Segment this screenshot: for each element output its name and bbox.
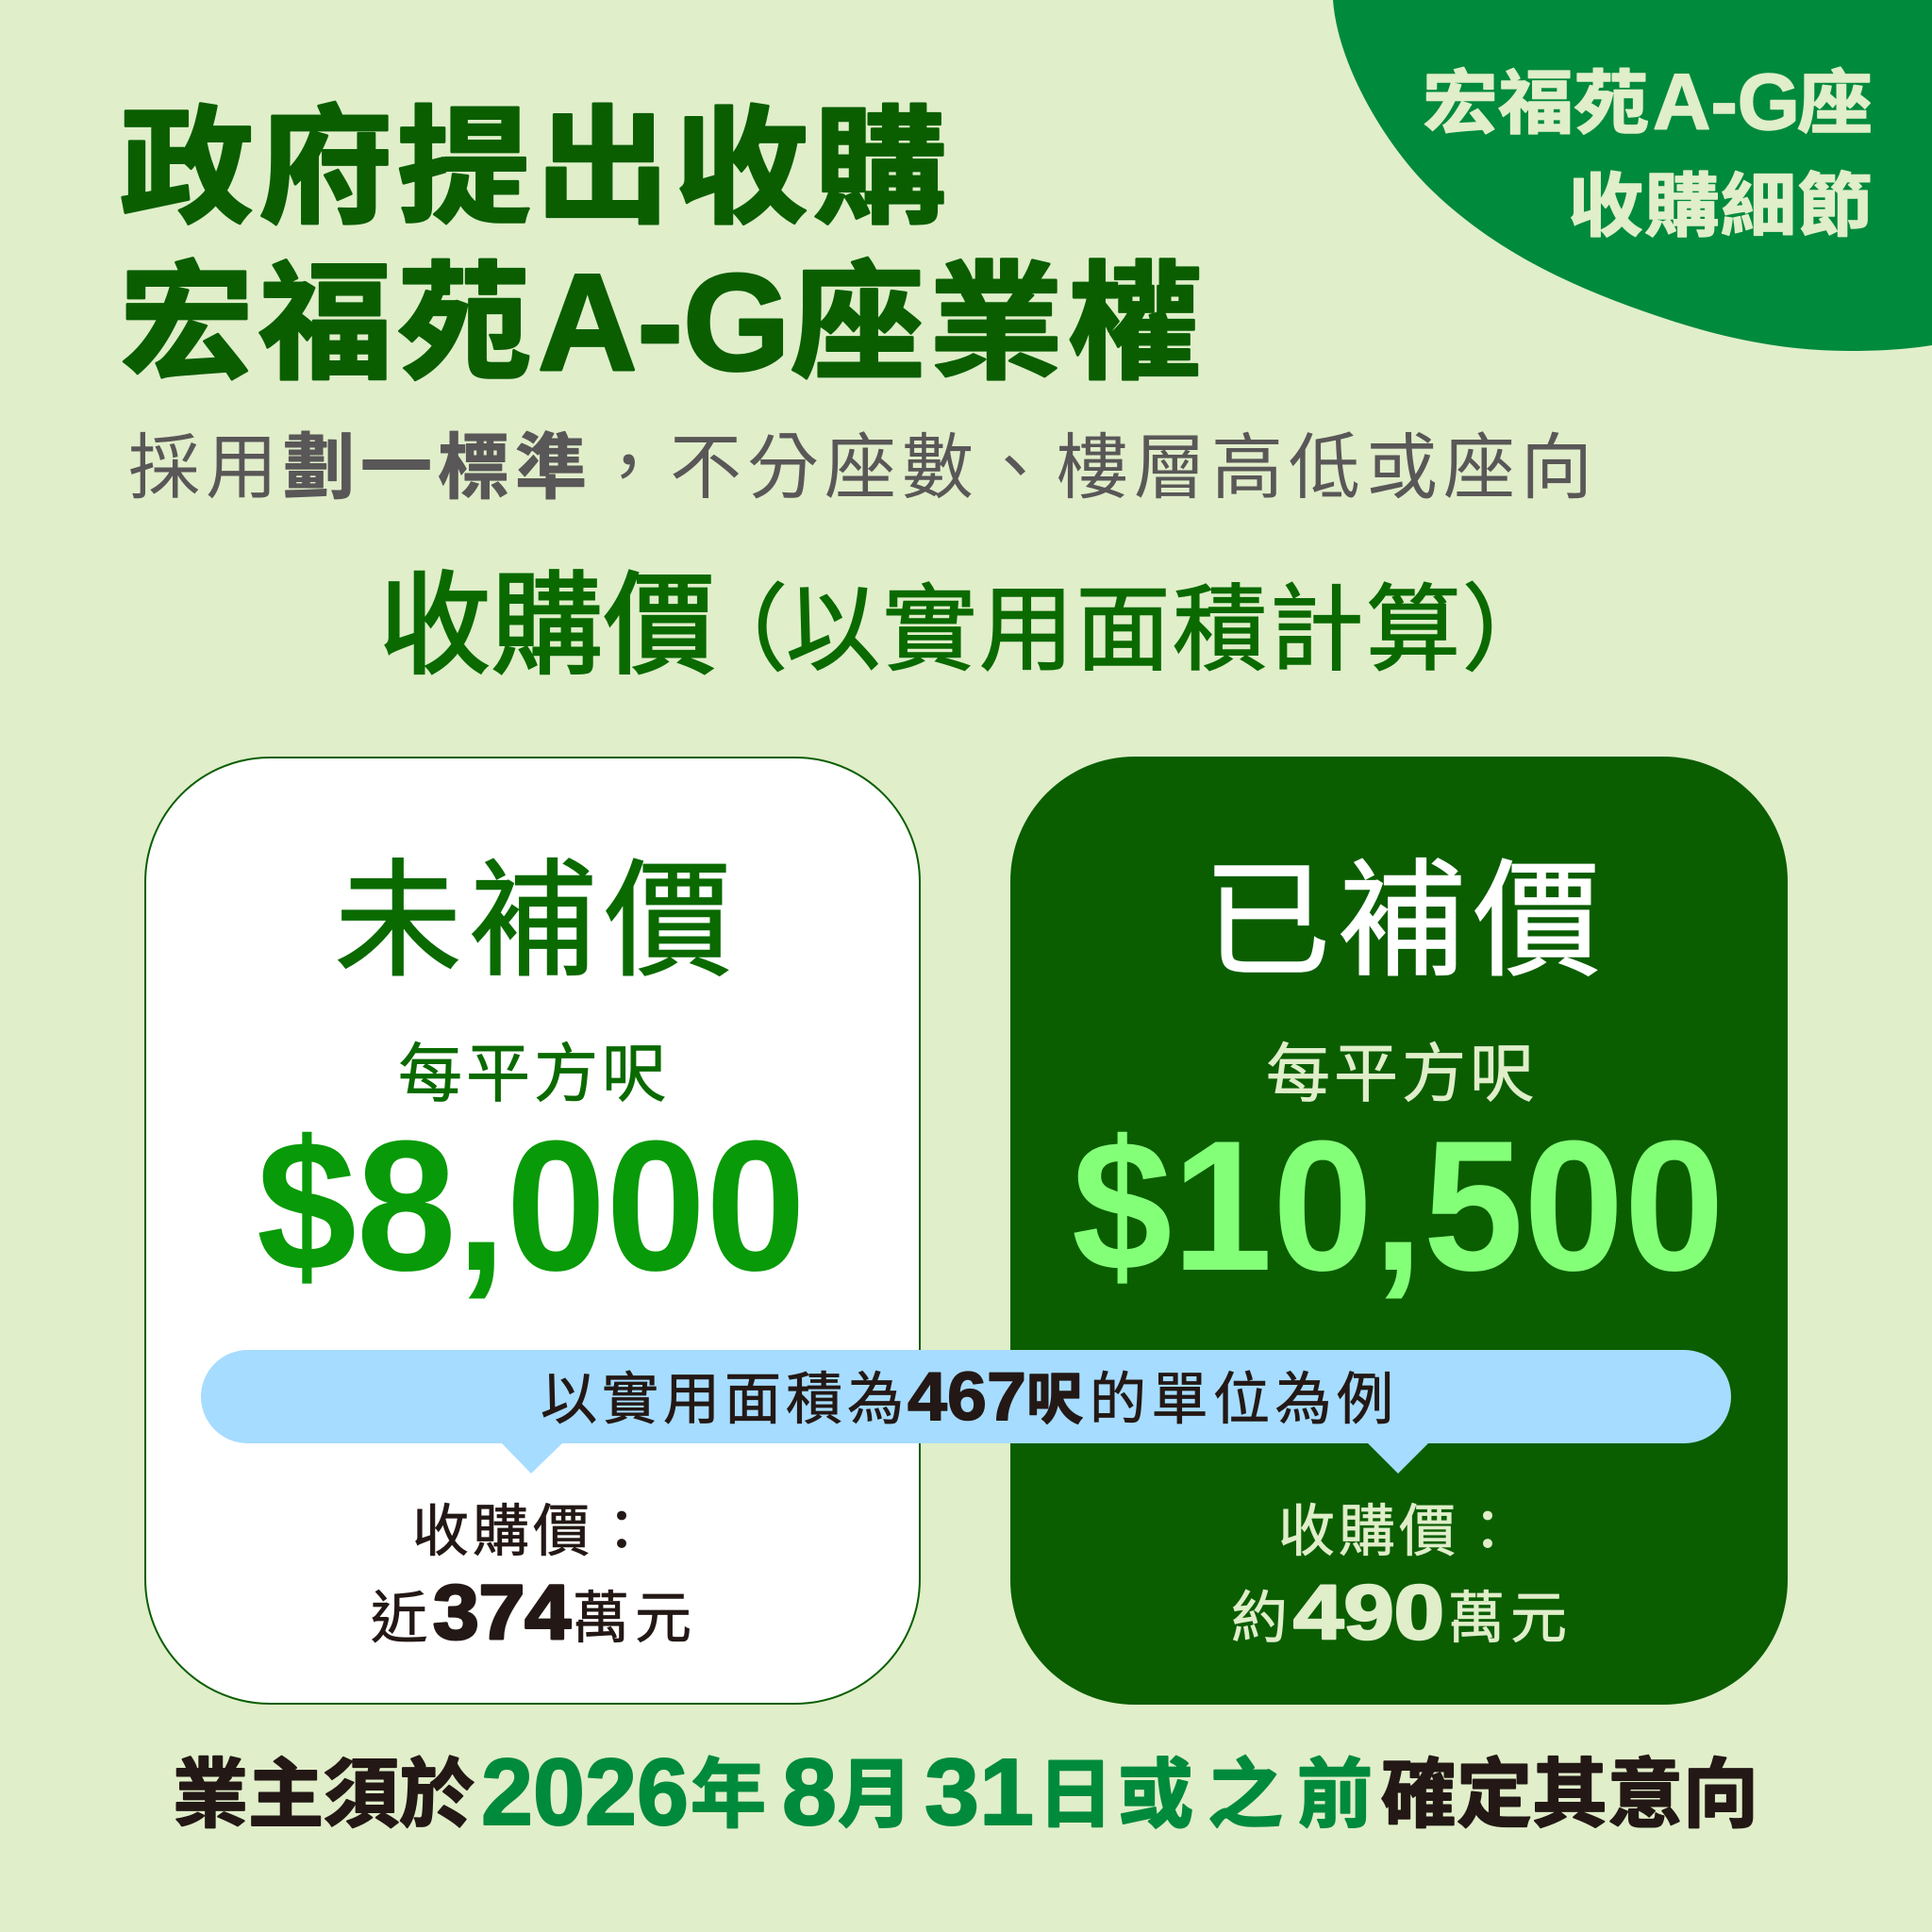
panel heading: 已補價 [1204,850,1607,992]
deadline date: 31 [924,1740,1034,1845]
callout [201,1350,1731,1474]
unit label: 每平方呎 [1266,1039,1538,1110]
acquisition label: 收購價： [412,1500,654,1563]
section heading: ） [1462,577,1557,683]
title: 政府提出收購 [120,97,952,240]
acquisition value [1231,1570,1573,1656]
callout text [541,1359,1398,1435]
panel: subsidised price [1010,757,1788,1705]
deadline date: 2026 [481,1740,689,1845]
unit label: 每平方呎 [398,1039,670,1110]
acquisition label: 收購價： [1278,1500,1520,1563]
acquisition value: 374 [433,1570,571,1656]
deadline date: 年 [691,1753,766,1837]
deadline date: 月 [838,1753,913,1837]
section heading: 以實用面積計算 [786,577,1462,683]
acquisition value: 萬元 [1448,1587,1573,1650]
acquisition value: 490 [1293,1570,1444,1656]
panel: unsubsidised price [145,758,920,1704]
title: A-G [538,245,791,399]
badge text: 收購細節 [1568,168,1874,245]
acquisition value: 萬元 [573,1587,697,1650]
deadline date: 8 [782,1740,837,1845]
badge text: 座 [1797,65,1873,142]
acquisition value: 近 [371,1587,427,1650]
callout text: 以實用面積為 [541,1368,908,1431]
title [120,97,1207,399]
callout text: 呎 [1026,1368,1083,1431]
callout text: 的單位為例 [1090,1368,1398,1431]
deadline date: 日 [1038,1753,1113,1837]
deadline date: 或之前 [1118,1753,1387,1837]
section heading [379,564,1557,689]
section heading: 收購價 [379,564,716,689]
price: $10,500 [1072,1102,1724,1309]
badge text [1423,58,1874,245]
corner badge [1333,0,1932,351]
callout text: 467 [908,1359,1026,1435]
deadline [173,1740,1758,1845]
acquisition value: 約 [1231,1587,1288,1650]
deadline: 業主須於 [173,1753,475,1837]
title: 宏福苑 [120,253,536,395]
panel heading: 未補價 [334,850,740,992]
acquisition value [371,1570,697,1656]
price: $8,000 [257,1102,806,1309]
deadline date [481,1740,1387,1845]
subtitle: 採用劃一標準，不分座數、樓層高低或座向 [128,428,1598,508]
badge text: 宏福苑 [1423,65,1649,142]
badge text: A-G [1653,58,1800,146]
section heading: （ [693,577,788,683]
title: 座業權 [791,253,1207,395]
deadline: 確定其意向 [1381,1753,1758,1837]
